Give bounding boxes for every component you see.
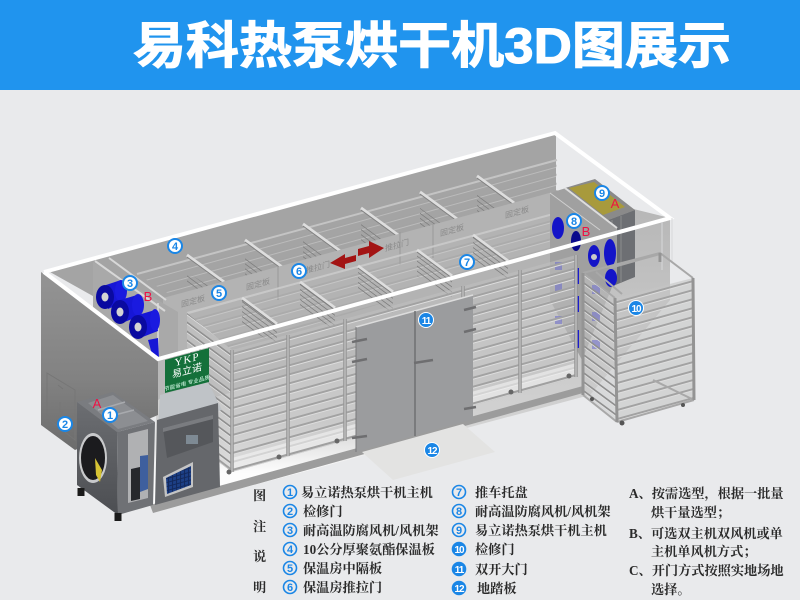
legend column one: 耐高温防腐风机/风机架 (303, 522, 439, 538)
diagram number markers: 7 (464, 257, 470, 269)
inner end panel below sign (158, 382, 222, 428)
legend column one: 10公分厚聚氨酯保温板 (303, 541, 435, 557)
legend column two (452, 484, 611, 596)
floor ramp (362, 424, 495, 480)
diagram number markers: 2 (62, 419, 68, 431)
header band (0, 0, 800, 90)
legend column one: 6 (287, 582, 293, 594)
left wall (41, 272, 158, 450)
legend column one: 1 (287, 487, 293, 499)
legend column two: 9 (456, 525, 462, 537)
inspection door on left wall (47, 373, 75, 440)
diagram number markers: 8 (571, 216, 577, 228)
push-cart racks, front row (187, 255, 576, 474)
unit: control box (155, 403, 220, 505)
legend notes A B C: B、可选双主机双风机或单 (629, 525, 783, 541)
middle partition with fixed panels and sliding door: 固定板 (181, 293, 205, 309)
fan wall with blue fans (93, 258, 178, 365)
red labels: B (144, 289, 152, 304)
interior floor (153, 190, 670, 512)
legend heading: 图注说明: 注 (253, 518, 266, 534)
fan two (111, 294, 144, 324)
left corner post (158, 357, 165, 400)
legend column two: 11 (455, 565, 465, 576)
red labels: A (93, 396, 102, 411)
legend column one: 2 (287, 506, 293, 518)
middle partition with fixed panels and sliding door: 固定板 (440, 222, 464, 238)
legend column one: 4 (287, 544, 294, 556)
diagram number markers: 3 (127, 278, 133, 290)
middle row of rack tops (187, 213, 557, 350)
legend heading: 图注说明: 明 (253, 580, 266, 595)
sign: YKP brand: 易立诺 (172, 360, 202, 381)
diagram number markers: 1 (107, 410, 113, 422)
red labels: A (611, 196, 620, 211)
floor edge strip (150, 386, 583, 513)
legend column two: 8 (456, 506, 462, 518)
legend column one: 保温房推拉门 (303, 579, 382, 595)
legend column two: 易立诺热泵烘干机主机 (475, 522, 607, 538)
white top frame (44, 133, 672, 359)
cart rack (583, 253, 694, 426)
heat pump host unit A (77, 392, 220, 521)
legend notes A B C (629, 485, 784, 597)
title: 易科热泵烘干机3D图展示 (133, 18, 731, 74)
sliding door arrows (330, 241, 384, 269)
double door (352, 295, 476, 452)
sign: YKP brand: YKP (175, 351, 199, 369)
diagram number markers: 4 (172, 241, 179, 253)
diagram number markers: 10 (631, 304, 642, 315)
legend heading: 图注说明: 说 (253, 548, 266, 564)
middle partition with fixed panels and sliding door (163, 192, 553, 412)
legend heading: 图注说明: 图 (253, 488, 266, 503)
drying room (41, 133, 694, 513)
middle partition with fixed panels and sliding door: 推拉门 (306, 259, 330, 275)
icon: fan (79, 433, 107, 483)
diagram number markers: 5 (216, 288, 222, 300)
legend column two: 10 (454, 545, 465, 556)
red labels (93, 196, 620, 411)
middle partition with fixed panels and sliding door: 固定板 (505, 204, 529, 220)
sign: YKP brand: 节能省电 专业品质 (164, 373, 210, 393)
red labels: B (582, 224, 590, 239)
diagram number markers: 9 (599, 188, 605, 200)
legend notes A B C: 主机单风机方式； (651, 543, 756, 559)
legend column two: 推车托盘 (475, 484, 528, 500)
legend column one: 3 (287, 525, 293, 537)
legend notes A B C: 选择。 (651, 581, 691, 597)
back wall (50, 133, 556, 312)
diagram number markers: 11 (422, 316, 432, 327)
unit: evaporator box (77, 402, 118, 515)
legend column one: 5 (287, 563, 293, 575)
back row of racks (137, 160, 557, 309)
unit feet (81, 488, 118, 521)
legend notes A B C: C、开门方式按照实地场地 (629, 562, 784, 578)
diagram number markers: 12 (427, 446, 438, 457)
middle partition with fixed panels and sliding door: 推拉门 (385, 237, 409, 253)
legend column two: 双开大门 (475, 561, 528, 577)
legend notes A B C: A、按需选型，根据一批量 (629, 485, 784, 502)
legend column two: 7 (456, 487, 462, 499)
legend heading: 图注说明 (253, 488, 266, 595)
sign: YKP brand (164, 348, 210, 393)
legend notes A B C: 烘干量选型； (650, 504, 730, 520)
legend column one: 易立诺热泵烘干机主机 (301, 484, 433, 500)
diagram number markers: 6 (296, 266, 302, 278)
legend column two: 地踏板 (477, 580, 517, 596)
legend column one: 保温房中隔板 (303, 560, 382, 576)
fan three (129, 309, 160, 339)
diagram number markers (58, 186, 644, 458)
fan four (148, 338, 159, 358)
host unit and fan rack at right end (550, 179, 635, 360)
legend column one: 检修门 (303, 503, 343, 519)
fan one (96, 280, 127, 309)
legend column one (284, 484, 439, 595)
legend column two: 检修门 (475, 541, 515, 557)
middle partition with fixed panels and sliding door: 固定板 (246, 276, 270, 292)
legend column two: 耐高温防腐风机/风机架 (475, 503, 611, 519)
legend column two: 12 (454, 584, 465, 595)
